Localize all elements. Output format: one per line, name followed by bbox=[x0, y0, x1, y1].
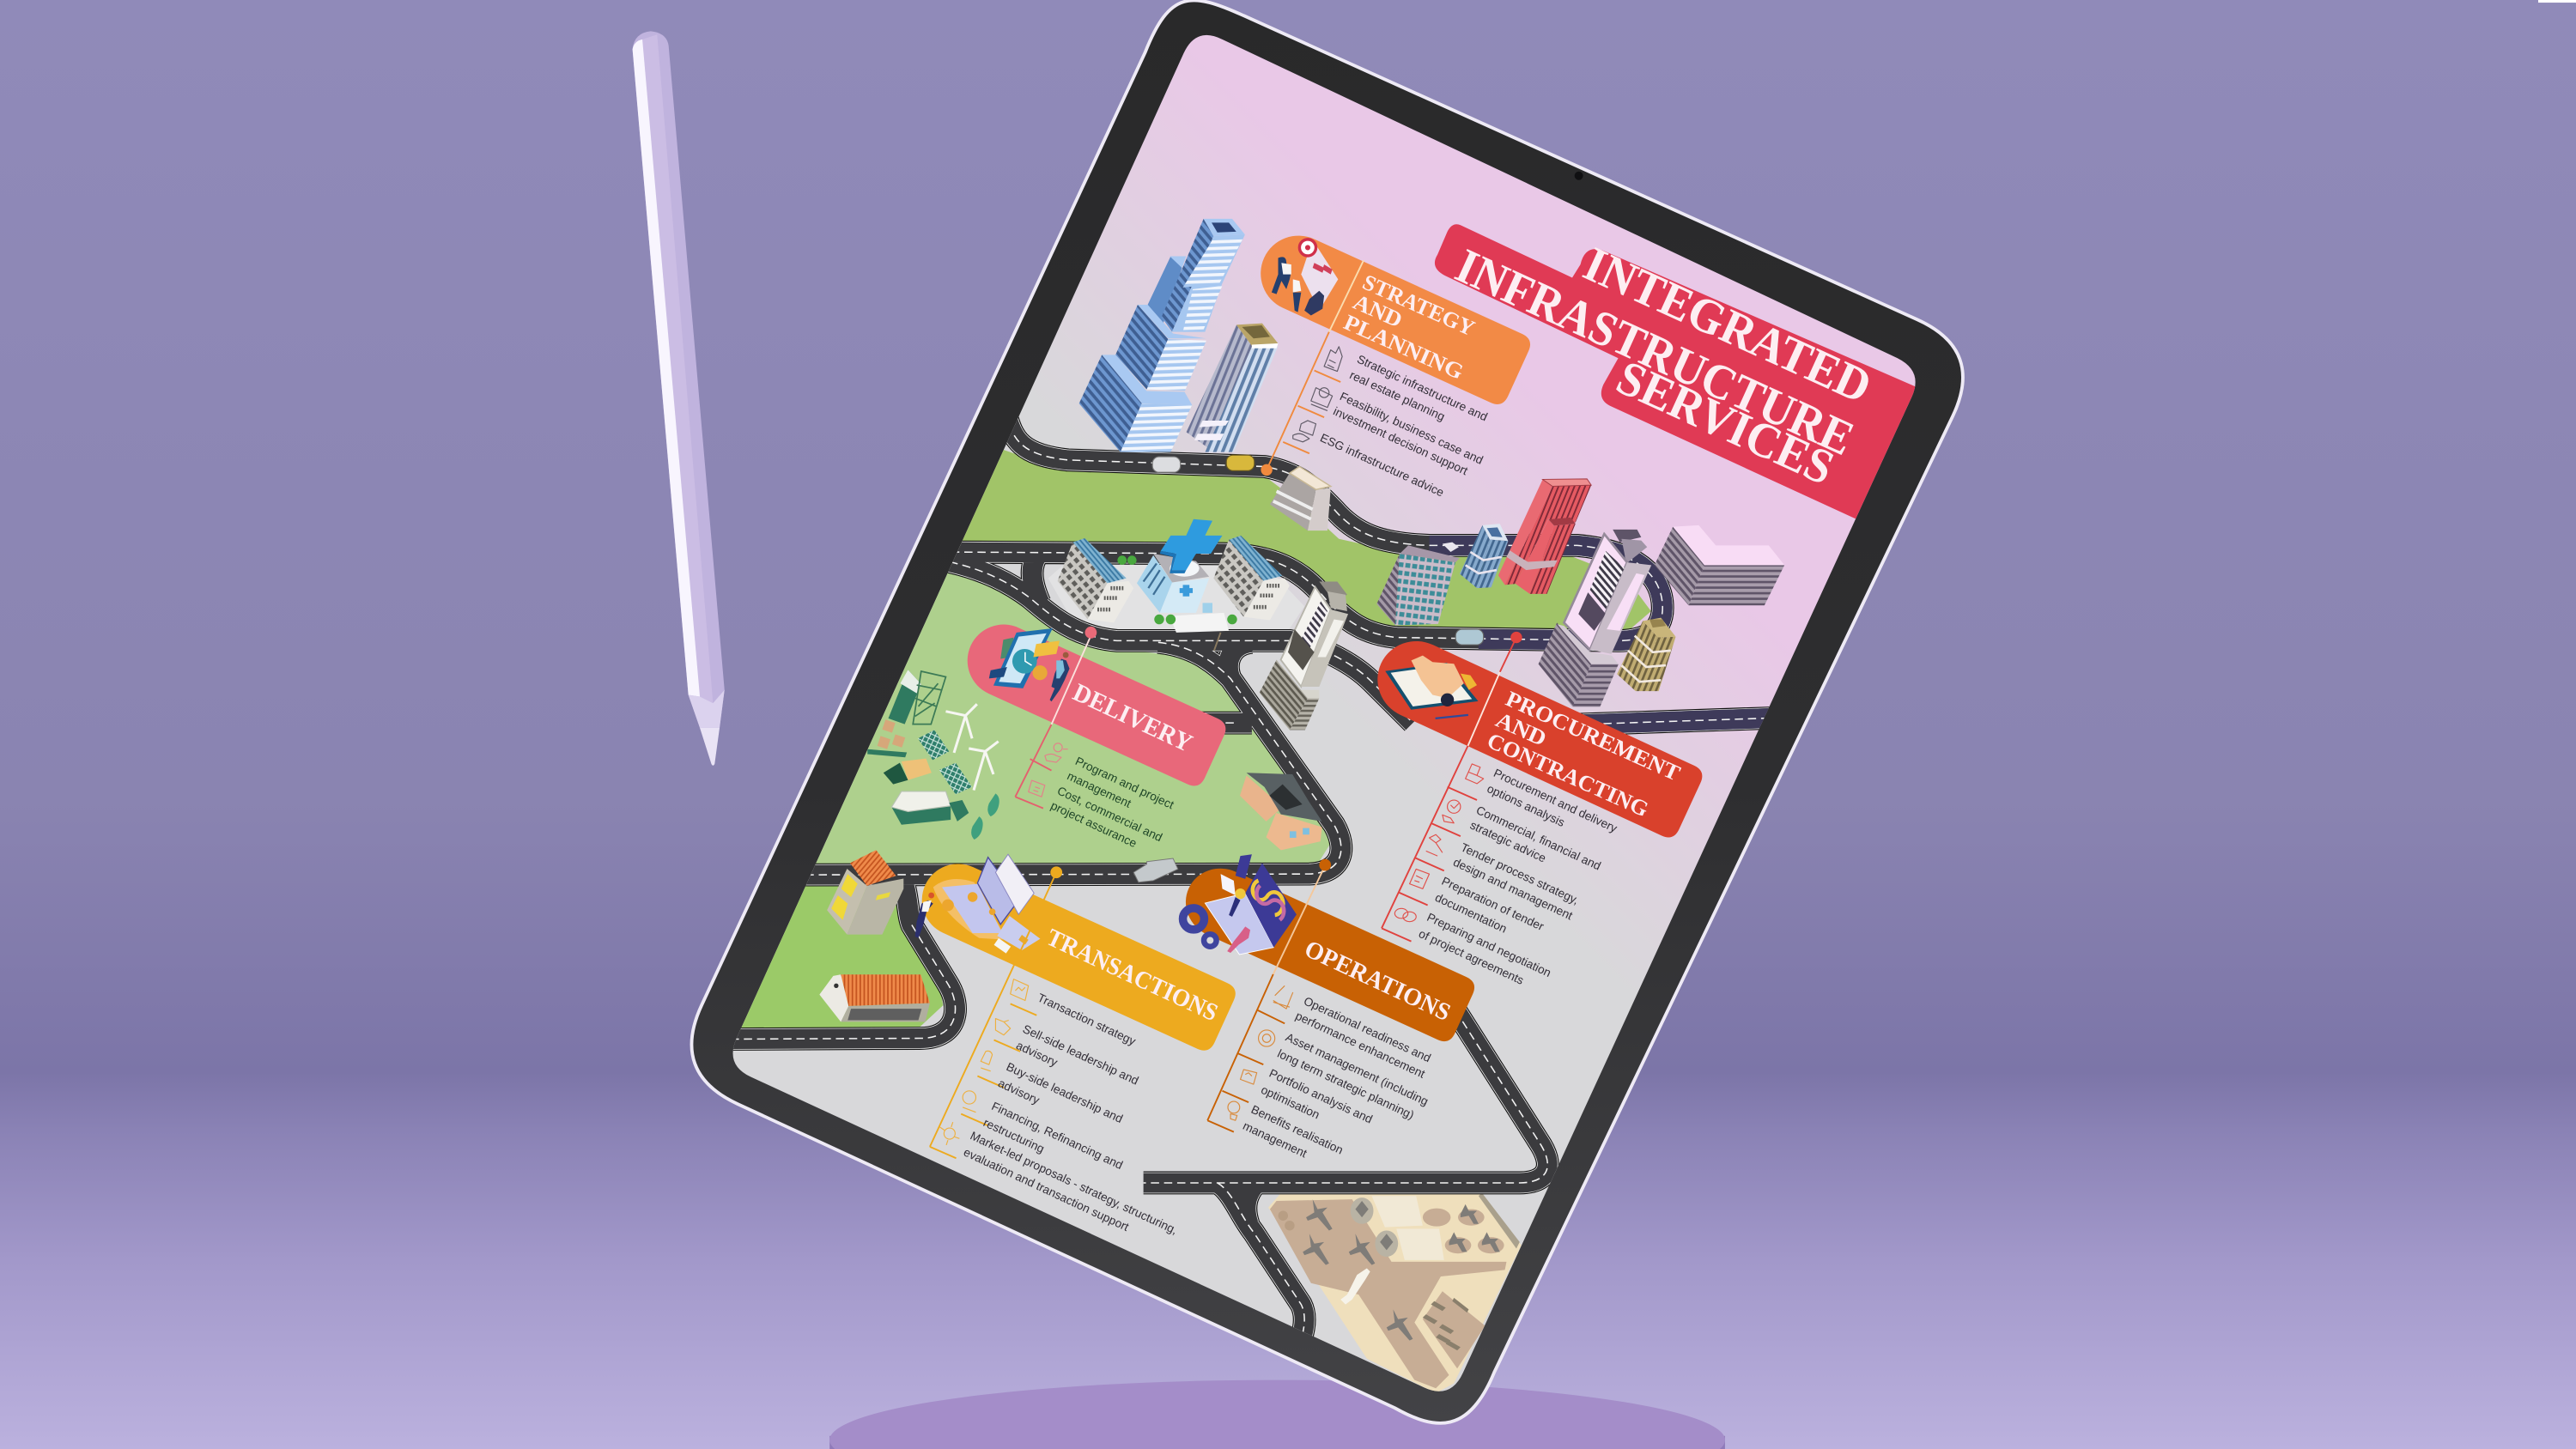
icon: operations screen and gears bbox=[1183, 854, 1297, 955]
green area delivery bbox=[788, 559, 1334, 870]
wind turbines bbox=[945, 704, 999, 791]
delivery list: Program and project bbox=[1073, 755, 1176, 811]
connector line bbox=[1382, 746, 1477, 942]
procurement list: Tender process strategy, bbox=[1459, 841, 1581, 906]
green area upper bbox=[937, 444, 1651, 633]
icon: contract and hand bbox=[1385, 656, 1479, 718]
renewable energy area bbox=[867, 670, 999, 840]
procurement list: Preparation of tender bbox=[1440, 875, 1546, 933]
procurement list: Preparing and negotiation bbox=[1425, 911, 1553, 979]
transactions heading: TRANSACTIONS bbox=[1042, 924, 1222, 1027]
title banner: SERVICES bbox=[1608, 350, 1842, 495]
strategy list: Feasibility, business case and bbox=[1338, 390, 1485, 467]
title text: INTEGRATED bbox=[1576, 237, 1880, 415]
procurement icons bbox=[1394, 764, 1484, 922]
building: beige block bbox=[1270, 467, 1331, 530]
operations list: optimisation bbox=[1259, 1083, 1321, 1121]
transactions list: Financing, Refinancing and bbox=[989, 1100, 1125, 1172]
transactions list: Sell-side leadership and bbox=[1021, 1022, 1140, 1088]
building: hangar bbox=[819, 974, 930, 1022]
building: small blue bbox=[1460, 524, 1508, 588]
cartons bbox=[878, 719, 905, 749]
hospital building bbox=[1137, 554, 1229, 633]
screen background bbox=[733, 34, 1916, 1391]
building: pink L block bbox=[1655, 525, 1784, 605]
transactions list: advisory bbox=[996, 1076, 1042, 1106]
camera bbox=[1575, 172, 1583, 180]
strategy list: Strategic infrastructure and bbox=[1355, 353, 1490, 423]
pedestal bbox=[829, 1380, 1725, 1449]
lattice tower bbox=[913, 671, 945, 724]
procurement list: strategic advice bbox=[1468, 819, 1548, 865]
operations list: management bbox=[1241, 1119, 1309, 1161]
transactions list: Buy-side leadership and bbox=[1005, 1060, 1125, 1125]
operations list: Portfolio analysis and bbox=[1267, 1067, 1375, 1126]
transactions icons bbox=[939, 979, 1029, 1145]
blue cross bbox=[1160, 519, 1222, 573]
operations icons bbox=[1228, 985, 1293, 1120]
airbase bbox=[1268, 1192, 1522, 1393]
procurement heading: PROCUREMENT bbox=[1502, 686, 1684, 786]
substation bbox=[889, 670, 921, 724]
transactions list bbox=[962, 991, 1180, 1237]
panel: strategy and planning: PLANNING bbox=[1340, 310, 1467, 385]
left apartment bbox=[1058, 538, 1133, 622]
operations list: long term strategic planning) bbox=[1275, 1047, 1416, 1122]
house bbox=[1240, 773, 1322, 850]
panel: operations bbox=[1175, 854, 1478, 1161]
hospital plaza bbox=[1048, 565, 1304, 629]
transactions list: restructuring bbox=[981, 1116, 1047, 1155]
procurement list: Procurement and delivery bbox=[1492, 767, 1619, 835]
vehicles bbox=[1133, 455, 1484, 882]
operations list: performance enhancement bbox=[1293, 1009, 1427, 1081]
strategy list bbox=[1318, 353, 1490, 500]
delivery list: project assurance bbox=[1048, 799, 1139, 850]
car blue bbox=[1455, 629, 1484, 645]
panel: procurement and contracting: CONTRACTING bbox=[1484, 728, 1652, 822]
procurement list: Commercial, financial and bbox=[1474, 803, 1603, 873]
trees bbox=[971, 793, 999, 840]
procurement list: design and management bbox=[1451, 856, 1575, 922]
connector line bbox=[930, 966, 1036, 1158]
panel: strategy and planning bbox=[1249, 223, 1534, 500]
solar panels bbox=[918, 730, 949, 760]
transactions list: Market-led proposals - strategy, structuring, bbox=[969, 1129, 1180, 1237]
icon: transactions laptop bbox=[915, 854, 1040, 954]
road sign bbox=[1214, 633, 1221, 651]
icon: delivery phone and person bbox=[989, 628, 1070, 701]
strategy list: investment decision support bbox=[1331, 404, 1470, 477]
icon: strategy team bbox=[1272, 239, 1338, 315]
procurement list: options analysis bbox=[1485, 782, 1567, 829]
hospital complex bbox=[1058, 519, 1290, 633]
panel: procurement and contracting bbox=[1365, 628, 1706, 987]
transactions list: advisory bbox=[1014, 1039, 1060, 1069]
panel: transactions bbox=[910, 852, 1239, 1237]
operations list bbox=[1241, 994, 1433, 1161]
green area lower left bbox=[723, 884, 943, 1032]
building: grey-blue tower bbox=[1187, 324, 1279, 452]
building: blue tower bbox=[1079, 219, 1245, 452]
truck bbox=[1133, 858, 1178, 882]
connector line bbox=[1207, 974, 1285, 1132]
delivery heading: DELIVERY bbox=[1068, 679, 1196, 758]
delivery list: Cost, commercial and bbox=[1055, 785, 1164, 844]
panel: procurement and contracting: AND bbox=[1492, 707, 1550, 751]
building: tan block bbox=[1617, 618, 1676, 691]
building: mid tower bbox=[1260, 581, 1348, 730]
panel: strategy and planning: AND bbox=[1350, 289, 1406, 332]
operations list: Operational readiness and bbox=[1302, 994, 1433, 1064]
tablet body bbox=[691, 0, 1963, 1423]
strategy list: ESG infrastructure advice bbox=[1318, 431, 1446, 500]
road network bbox=[731, 410, 1774, 1339]
procurement list: documentation bbox=[1433, 891, 1509, 936]
trees bbox=[1117, 555, 1237, 624]
delivery icons bbox=[1029, 743, 1068, 797]
connector line bbox=[1015, 724, 1051, 809]
delivery list bbox=[1048, 755, 1176, 850]
operations list: Asset management (including bbox=[1284, 1031, 1431, 1108]
delivery list: management bbox=[1065, 769, 1133, 810]
strategy icons bbox=[1293, 347, 1342, 442]
car yellow bbox=[1226, 455, 1255, 470]
corner mark bbox=[2538, 0, 2576, 3]
building: red tower bbox=[1498, 479, 1591, 594]
building: large purple tower bbox=[1539, 530, 1651, 707]
tablet screen bbox=[733, 34, 1916, 1391]
transactions list: Transaction strategy bbox=[1036, 991, 1138, 1048]
operations list: Benefits realisation bbox=[1249, 1103, 1345, 1157]
procurement list: of project agreements bbox=[1417, 927, 1526, 987]
car white bbox=[1152, 457, 1181, 472]
stylus pencil bbox=[633, 31, 725, 766]
right apartment bbox=[1213, 536, 1290, 620]
panel: delivery bbox=[956, 613, 1230, 850]
operations heading: OPERATIONS bbox=[1300, 935, 1455, 1027]
green building bbox=[891, 791, 969, 825]
transactions list: evaluation and transaction support bbox=[962, 1146, 1131, 1234]
strategy list: real estate planning bbox=[1348, 368, 1447, 423]
building: purple block bbox=[1376, 543, 1460, 625]
building: left apartment bbox=[827, 850, 903, 935]
procurement list bbox=[1417, 767, 1619, 987]
delivery truck bbox=[884, 759, 932, 785]
title banner: INFRASTRUCTURE bbox=[1448, 239, 1862, 466]
strategy heading: STRATEGY bbox=[1359, 270, 1479, 341]
connector line bbox=[1267, 332, 1340, 470]
